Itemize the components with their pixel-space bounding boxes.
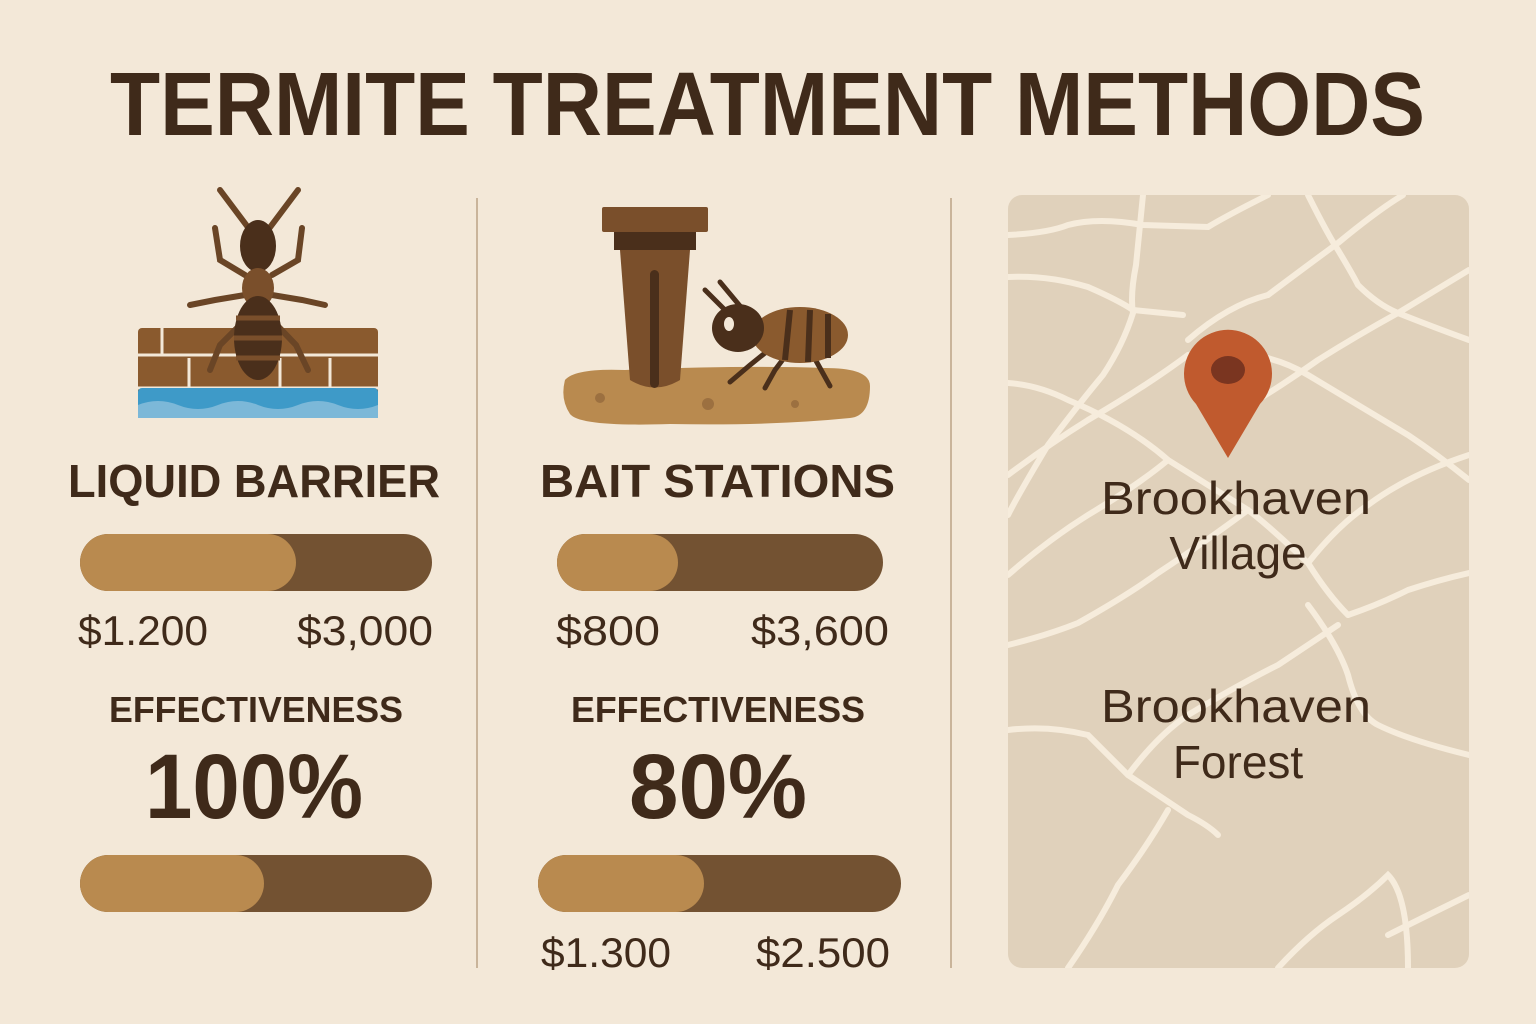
panel: bait stations	[538, 207, 901, 976]
cost labels bottom: $2.500	[756, 929, 890, 976]
cost labels bottom	[541, 929, 890, 976]
cost labels: $1.200	[78, 607, 208, 654]
cost labels	[556, 607, 889, 654]
effectiveness value: 100%	[145, 736, 363, 838]
bar: second cost range	[538, 855, 901, 912]
panel: map	[1008, 195, 1469, 968]
effectiveness label: EFFECTIVENESS	[109, 689, 403, 730]
cost labels bottom: $1.300	[541, 929, 671, 976]
panel: liquid barrier	[68, 190, 440, 912]
heading: liquid barrier: LIQUID BARRIER	[68, 455, 440, 507]
heading: bait stations: BAIT STATIONS	[540, 455, 895, 507]
map label: Brookhaven Forest	[1101, 680, 1371, 788]
title: TERMITE TREATMENT METHODS	[110, 55, 1425, 155]
map label: Brookhaven Forest: Forest	[1173, 736, 1303, 788]
icon: termite on brick wall with water	[138, 190, 378, 418]
cost labels: $3,000	[297, 607, 433, 654]
cost labels	[78, 607, 433, 654]
icon: bait station and termite	[563, 207, 870, 425]
map label: Brookhaven Forest: Brookhaven	[1101, 680, 1371, 732]
map label: Brookhaven Village: Village	[1169, 527, 1307, 579]
effectiveness label: EFFECTIVENESS	[571, 689, 865, 730]
cost labels: $800	[556, 607, 660, 654]
icon: map pin	[1184, 330, 1272, 458]
cost labels: $3,600	[751, 607, 889, 654]
effectiveness value: 80%	[629, 736, 807, 838]
bar: effectiveness	[80, 855, 432, 912]
bar: cost range	[557, 534, 883, 591]
map label: Brookhaven Village: Brookhaven	[1101, 472, 1371, 524]
map label: Brookhaven Village	[1101, 472, 1371, 579]
bar: cost range	[80, 534, 432, 591]
